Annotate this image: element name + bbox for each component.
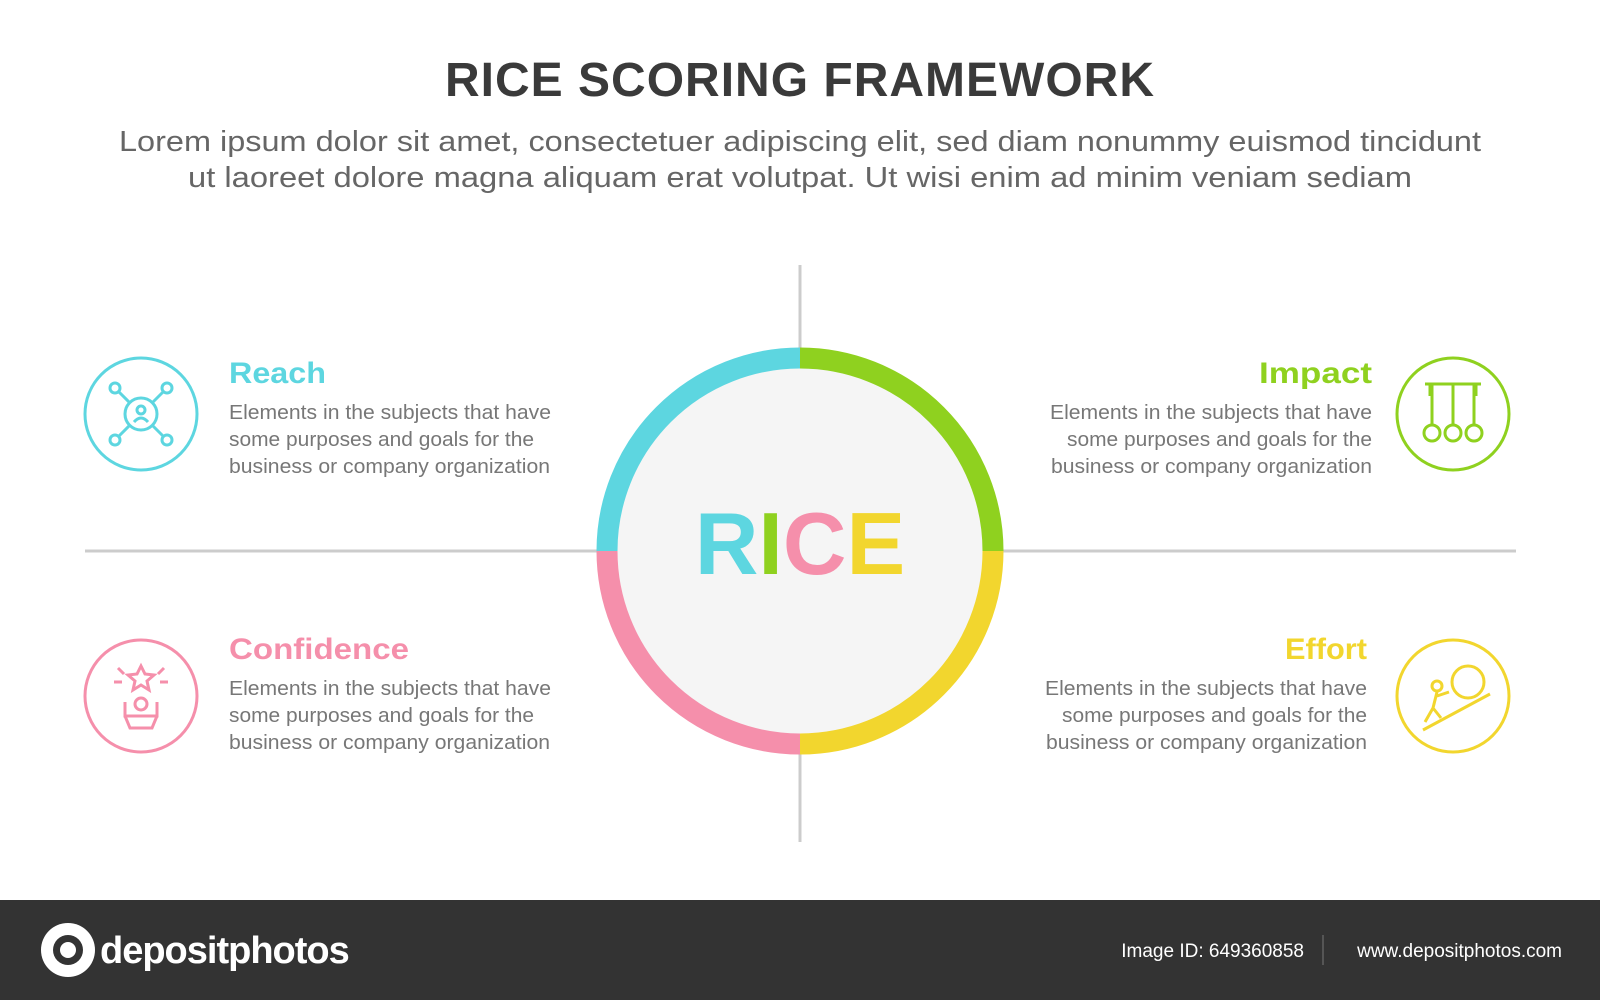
text: effort <box>1045 633 1367 754</box>
text: impact: Impact <box>1259 357 1372 390</box>
text: reach: some purposes and goals for the <box>229 428 534 451</box>
text: effort: Elements in the subjects that have <box>1045 677 1367 700</box>
text: confidence: Confidence <box>229 633 409 666</box>
RICE text: RICE <box>695 494 905 593</box>
icon: reach <box>85 358 197 470</box>
footer bar: depositphotos <box>100 930 349 972</box>
text: confidence: business or company organization <box>229 731 550 754</box>
text: confidence <box>229 633 551 754</box>
text: effort: Effort <box>1285 633 1367 666</box>
text: reach: Reach <box>229 357 326 390</box>
text: reach: business or company organization <box>229 455 550 478</box>
text: impact: some purposes and goals for the <box>1067 428 1372 451</box>
text: effort: some purposes and goals for the <box>1062 704 1367 727</box>
footer bar: Image ID: 649360858 <box>1121 941 1304 962</box>
text: impact <box>1050 357 1372 478</box>
text: confidence: some purposes and goals for the <box>229 704 534 727</box>
subtitle: Lorem ipsum dolor sit amet, consectetuer adipiscing elit, sed diam nonummy euismod tincidunt <box>119 126 1481 158</box>
footer bar: www.depositphotos.com <box>1356 941 1562 962</box>
title: RICE SCORING FRAMEWORK <box>445 54 1155 107</box>
text: impact: business or company organization <box>1051 455 1372 478</box>
text: reach <box>229 357 551 478</box>
subtitle: ut laoreet dolore magna aliquam erat volutpat. Ut wisi enim ad minim veniam sediam <box>188 162 1412 194</box>
text: effort: business or company organization <box>1046 731 1367 754</box>
subtitle <box>119 126 1481 194</box>
text: impact: Elements in the subjects that have <box>1050 401 1372 424</box>
icon: confidence <box>85 640 197 752</box>
central ring <box>607 358 993 744</box>
icon: effort <box>1397 640 1509 752</box>
text: confidence: Elements in the subjects that have <box>229 677 551 700</box>
icon: impact <box>1397 358 1509 470</box>
footer bar <box>0 900 1600 1000</box>
text: reach: Elements in the subjects that have <box>229 401 551 424</box>
